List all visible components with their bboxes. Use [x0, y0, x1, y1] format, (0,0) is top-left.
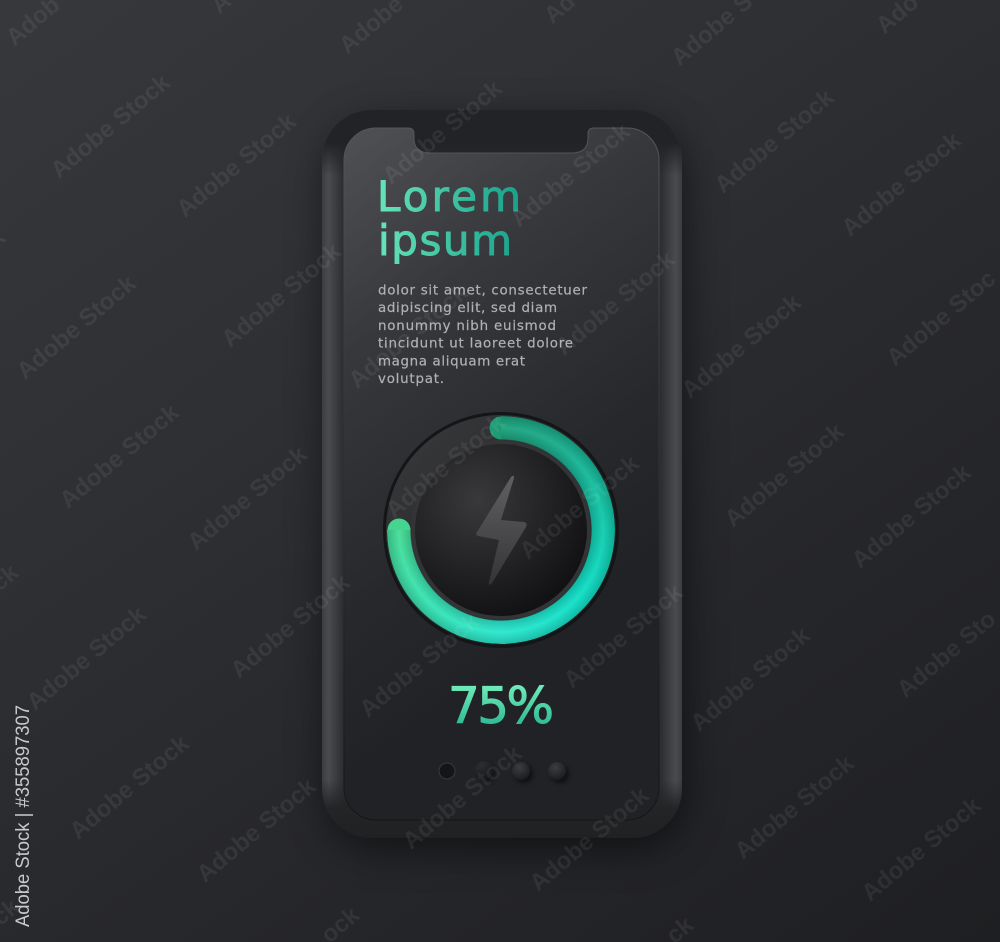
watermarks: Adobe Stock [514, 449, 645, 565]
watermarks: Adobe Stock [64, 729, 195, 845]
ring end caps [388, 416, 501, 530]
battery gauge well [383, 412, 619, 648]
watermarks: Adobe Stock [21, 600, 152, 716]
body text [378, 284, 587, 387]
heading [377, 172, 521, 265]
watermarks: Adobe Stock [729, 749, 860, 865]
watermarks: Adobe Stock [550, 245, 681, 361]
watermarks: Adobe Stock [558, 578, 689, 694]
watermarks: Adobe Stock [397, 739, 528, 855]
stock credit vertical text: Adobe Stock | #355897307 [13, 705, 34, 927]
watermarks: Adobe Stock [676, 288, 807, 404]
heading: ipsum [378, 216, 512, 265]
icon: lightning bolt [476, 476, 527, 585]
central disc [411, 440, 591, 620]
watermarks: Adobe Stock [45, 68, 176, 184]
watermarks: Adobe Stock [216, 237, 347, 353]
watermarks: Adobe Stock [719, 417, 850, 533]
watermarks: Adobe Stock [343, 278, 474, 394]
watermarks: Adobe Stock [836, 126, 967, 242]
percentage value: 75% [448, 677, 554, 735]
body text: tincidunt ut laoreet dolore [378, 336, 573, 352]
body text: dolor sit amet, consectetuer [378, 284, 587, 298]
battery progress ring 75 percent [387, 416, 615, 644]
body text: nonummy nibh euismod [378, 319, 556, 334]
watermarks: Adobe Stock [377, 74, 508, 190]
watermarks: Adobe Stock [182, 440, 313, 556]
watermarks: Adobe Stock [225, 568, 356, 684]
body text: volutpat. [378, 372, 444, 387]
watermarks: Adobe Stock [354, 607, 485, 723]
watermarks: Adobe Stock [11, 269, 142, 385]
watermarks: Adobe Stock [524, 781, 655, 897]
body text: magna aliquam erat [378, 354, 525, 369]
watermarks: Adobe Stock [709, 83, 840, 199]
watermarks: Adobe Stock [856, 791, 987, 907]
watermarks: Adobe Stock [191, 772, 322, 888]
phone frame [322, 110, 682, 838]
watermarks: Adobe Stock [505, 117, 636, 233]
watermarks: Adobe Stock [54, 398, 185, 514]
heading: Lorem [377, 172, 521, 221]
watermarks: Adobe Stock [846, 458, 977, 574]
watermarks: Adobe Stock [685, 621, 816, 737]
body text: adipiscing elit, sed diam [378, 301, 557, 316]
watermarks: Adobe Stock [171, 107, 302, 223]
watermarks: Adobe Stoc [882, 265, 1000, 372]
watermarks: Adobe Stock [380, 408, 511, 524]
phone screen with notch [344, 128, 659, 820]
pagination dots [439, 761, 569, 783]
phone shadow [326, 122, 686, 850]
watermarks: Adobe Sto [892, 605, 1000, 703]
